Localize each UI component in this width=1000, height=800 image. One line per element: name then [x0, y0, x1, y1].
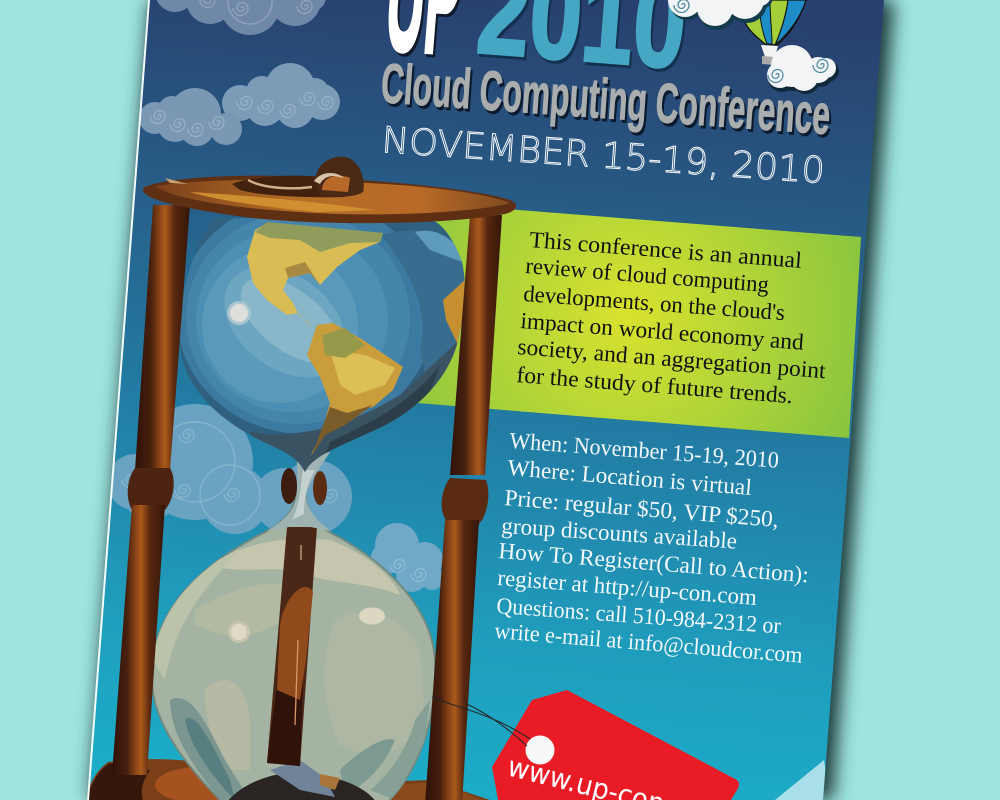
- tag hole: [526, 736, 554, 764]
- details text: write e-mail at info@cloudcor.com: [494, 618, 804, 668]
- south america: [307, 323, 403, 457]
- neck: [267, 452, 331, 531]
- illustration: hourglass: [85, 157, 516, 800]
- centre post: [267, 527, 317, 766]
- north america: [247, 222, 383, 328]
- description text: review of cloud computing: [525, 253, 770, 297]
- cloud: middle left: [139, 88, 242, 146]
- details text: When: November 15-19, 2010: [509, 428, 780, 473]
- description text: [516, 227, 827, 408]
- description text: developments, on the cloud's: [523, 281, 786, 325]
- africa edge: [443, 280, 465, 344]
- tag string: [432, 697, 530, 746]
- globe: [180, 218, 465, 472]
- subtitle: [382, 62, 832, 138]
- top plate and knob: [143, 157, 516, 223]
- cloud: small right: [371, 523, 444, 592]
- icon: hot air balloon: [745, 0, 806, 65]
- panel: description: [405, 203, 861, 438]
- hourglass base: [85, 759, 490, 800]
- cloud: middle right: [222, 63, 340, 128]
- price tag: [432, 690, 739, 800]
- details text: Questions: call 510-984-2312 or: [496, 593, 782, 638]
- description text: This conference is an annual: [529, 227, 803, 273]
- lower glass bulb: [152, 490, 435, 800]
- icon: white cloud lower: [767, 45, 839, 94]
- details text: Where: Location is virtual: [507, 455, 753, 500]
- details text: Price: regular $50, VIP $250,: [504, 485, 780, 532]
- cloud: large behind hourglass: [107, 404, 352, 534]
- details text: register at http://up-con.com: [497, 565, 758, 610]
- left pillar: [112, 205, 190, 775]
- icon: white cloud upper: [668, 0, 773, 30]
- cloud: top left: [155, 0, 326, 35]
- poster left edge highlight: [87, 0, 150, 800]
- description text: for the study of future trends.: [516, 362, 794, 408]
- details text: [494, 428, 810, 668]
- description text: impact on world economy and: [520, 308, 805, 355]
- description text: society, and an aggregation point: [517, 334, 827, 383]
- date: NOVEMBER 15-19, 2010: [380, 120, 826, 192]
- corner triangle: [775, 760, 830, 800]
- details text: group discounts available: [501, 513, 738, 554]
- right pillar: [425, 215, 502, 800]
- illustration: balloon and clouds: [668, 0, 839, 94]
- details text: How To Register(Call to Action):: [498, 538, 810, 587]
- title: UP 2010: [388, 0, 686, 72]
